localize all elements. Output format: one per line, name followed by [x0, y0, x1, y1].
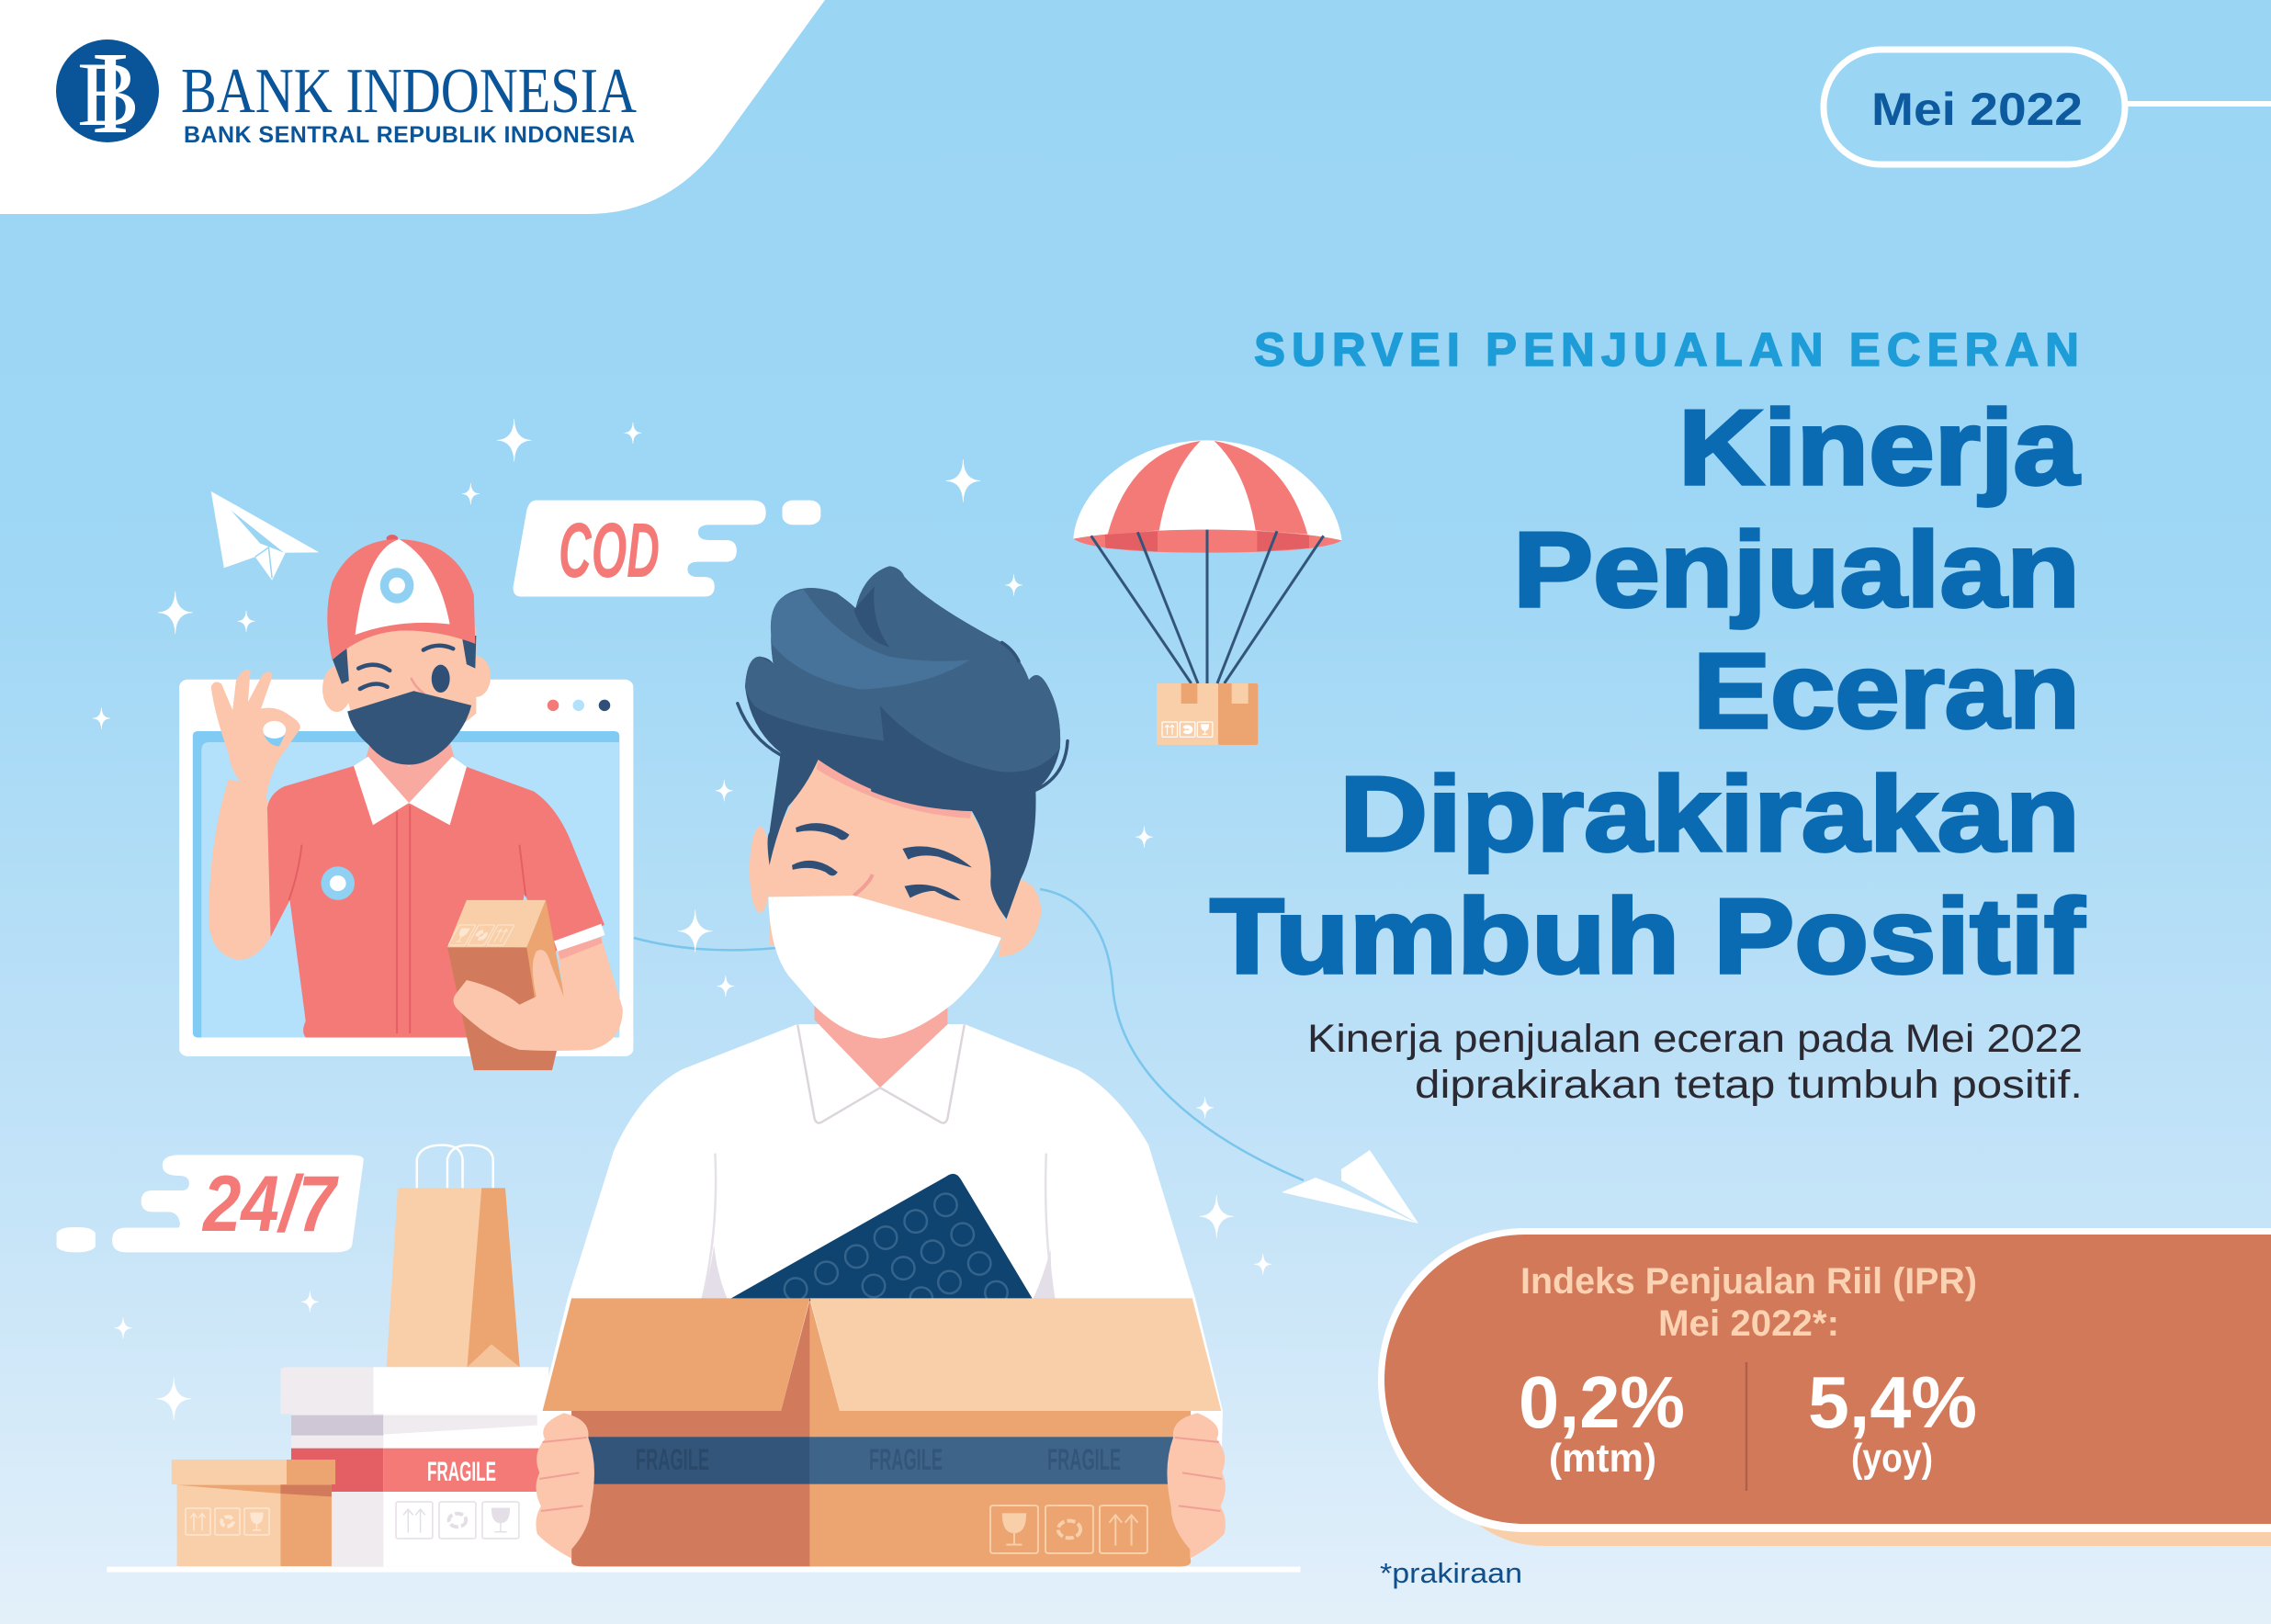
- hand shapes: [536, 1413, 594, 1559]
- box text labels: FRAGILE: [427, 1443, 1121, 1487]
- man: head, hair and mask: [702, 566, 1068, 1310]
- cap: [327, 535, 475, 660]
- box body: [571, 1300, 1191, 1566]
- title: [1210, 388, 2085, 996]
- stat: mtm: (mtm): [1549, 1436, 1656, 1481]
- subtitle text: Kinerja penjualan eceran pada Mei 2022: [1307, 1017, 2083, 1061]
- raised arm and OK hand: [209, 670, 300, 960]
- title: Eceran: [1693, 631, 2080, 750]
- box text labels: FRAGILE: FRAGILE: [427, 1457, 496, 1487]
- smiling eyes: [792, 823, 972, 900]
- title: Diprakirakan: [1339, 754, 2080, 874]
- bubble: COD: [514, 501, 820, 597]
- panel: online store window with delivery man: [179, 491, 820, 1070]
- hair: [738, 566, 1068, 919]
- bubble: 24/7 and shopping bag and boxes: [57, 1145, 1301, 1573]
- stat: mtm: [1519, 1361, 1685, 1481]
- panel heading: Indeks Penjualan Riil (IPR): [1520, 1261, 1977, 1302]
- title: Penjualan: [1513, 510, 2080, 629]
- logo: Bank Indonesia: I: [91, 28, 130, 158]
- logo: Bank Indonesia: BANK SENTRAL REPUBLIK INDONESIA: [184, 122, 635, 148]
- tape strap: [579, 1437, 1180, 1484]
- ground line: [107, 1567, 1301, 1573]
- date pill: Mei 2022: [1871, 84, 2083, 135]
- footnote: *prakiraan: [1380, 1557, 1522, 1589]
- parcel held by delivery man: [447, 900, 565, 1070]
- date pill: [1824, 50, 2271, 164]
- red uniform: [267, 757, 605, 1037]
- parcel icons on delivery box: [448, 925, 514, 945]
- panel heading: [1520, 1261, 1977, 1344]
- right hand: [1167, 1413, 1226, 1559]
- title: Tumbuh Positif: [1210, 876, 2085, 996]
- main cardboard box with hands: [536, 1298, 1226, 1566]
- header white panel: [0, 0, 825, 214]
- title: Kinerja: [1678, 388, 2081, 507]
- ears and face: [322, 615, 491, 767]
- icon: parachute with parcel: [1073, 440, 1342, 745]
- browser window: [179, 680, 633, 1056]
- stacked white box: [280, 1367, 596, 1567]
- sparkles: [93, 419, 1271, 1420]
- holding hand and forearm: [454, 937, 623, 1051]
- white face mask: [768, 896, 1001, 1039]
- subtitle text: diprakirakan tetap tumbuh positif.: [1415, 1063, 2083, 1107]
- neck: [366, 742, 455, 803]
- ears: [750, 827, 1041, 956]
- man: white shirt body: [540, 1024, 1223, 1562]
- neck: [815, 997, 947, 1088]
- icon: paper plane left: [211, 491, 319, 581]
- face: [770, 760, 1006, 945]
- divider: [1746, 1362, 1747, 1491]
- icons: small parcel handling marks: [186, 1508, 269, 1535]
- box text labels: FRAGILE: FRAGILE: [869, 1443, 943, 1476]
- icons: main box handling marks: [990, 1506, 1147, 1553]
- subtitle text: [1307, 1017, 2083, 1107]
- bubble shape: [57, 1155, 364, 1252]
- logo: Bank Indonesia: B: [77, 43, 140, 145]
- winking eyes: [358, 646, 453, 693]
- box text labels: FRAGILE: FRAGILE: [636, 1443, 709, 1476]
- icons: white box handling marks: [396, 1502, 519, 1539]
- stat: yoy: (yoy): [1851, 1436, 1933, 1481]
- stat: yoy: [1808, 1361, 1977, 1481]
- icon: paper plane right: [1282, 1150, 1418, 1224]
- shirt collar and seams: [702, 1024, 1055, 1301]
- box text labels: FRAGILE: FRAGILE: [1047, 1443, 1121, 1476]
- heading: survey label: SURVEI PENJUALAN ECERAN: [1254, 323, 2079, 376]
- logo: Bank Indonesia: BANK INDONESIA: [181, 56, 637, 127]
- tablet: [727, 1174, 1034, 1310]
- stat: mtm: 0,2%: [1519, 1361, 1685, 1443]
- connecting curves: [634, 889, 1304, 1180]
- stat: yoy: 5,4%: [1808, 1361, 1977, 1443]
- logo: Bank Indonesia: [56, 28, 637, 158]
- shirt lower folds: [702, 1245, 1055, 1301]
- small parcel: [172, 1460, 335, 1566]
- dark face mask: [347, 691, 471, 765]
- label: 24/7: 24/7: [201, 1160, 340, 1248]
- box flaps: [543, 1298, 1221, 1411]
- panel: IPR stats: [1378, 1228, 2271, 1546]
- panel heading: Mei 2022*:: [1658, 1303, 1839, 1344]
- shopping bag: [387, 1145, 520, 1367]
- label: COD: COD: [559, 507, 660, 593]
